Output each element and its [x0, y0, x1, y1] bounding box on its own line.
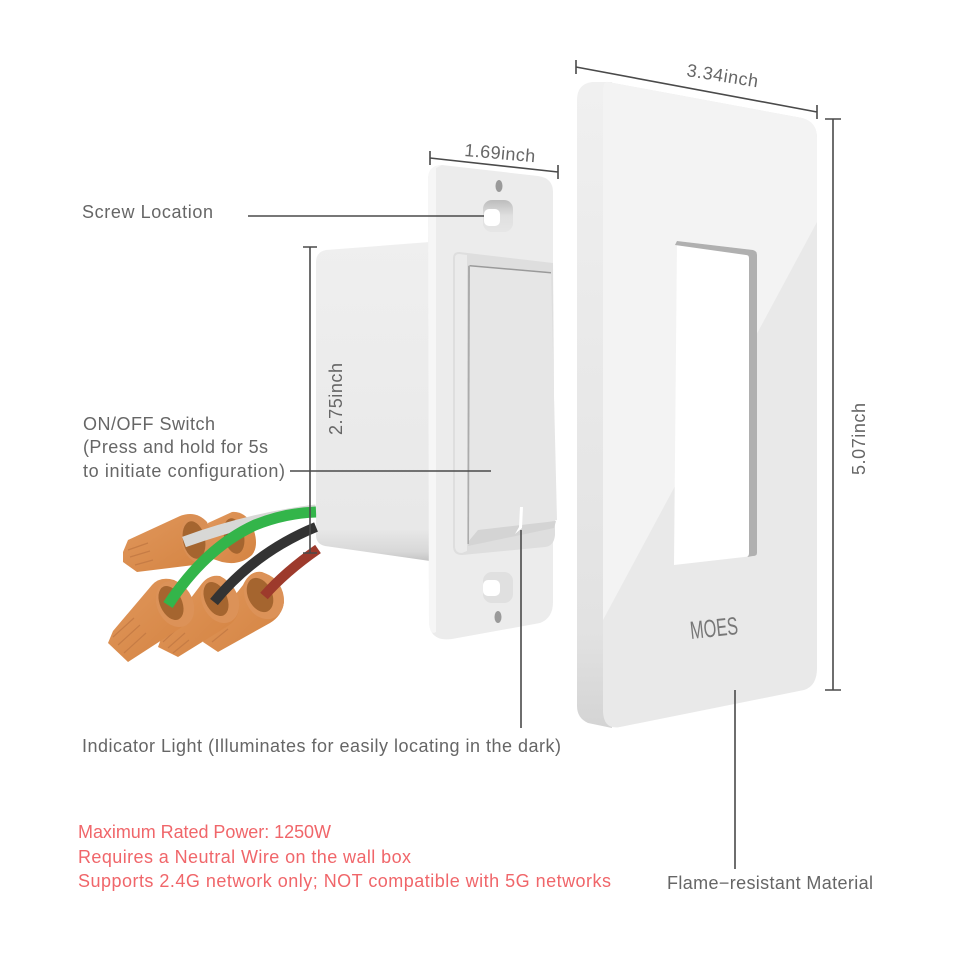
- dimension: 5.07 inch: 5.07inch: [849, 403, 869, 475]
- lower centre wire nut: [158, 571, 246, 657]
- front top wire nut: [123, 512, 218, 572]
- white wire: [184, 510, 316, 542]
- plate window: [674, 241, 757, 565]
- callout: indicator light: Indicator Light (Illuminates for easily locating in the dark): [82, 736, 561, 756]
- dimension: 3.34 inch: [576, 60, 817, 119]
- callout: on/off switch: ON/OFF Switch: [83, 414, 215, 434]
- dimension: 1.69 inch: [430, 140, 558, 179]
- lower right wire nut: [203, 566, 291, 652]
- plate gloss reflection: [603, 82, 817, 620]
- red specifications notes: Requires a Neutral Wire on the wall box: [78, 847, 411, 867]
- black wire: [214, 527, 316, 602]
- dimension: 5.07 inch: [825, 119, 869, 690]
- bottom mounting hole: [483, 572, 513, 623]
- green wire: [168, 512, 316, 605]
- callout: on/off switch: [83, 414, 491, 481]
- callout: screw location: Screw Location: [82, 202, 213, 222]
- dimension: 2.75 inch: [303, 247, 346, 553]
- top mounting hole: [483, 180, 513, 232]
- red specifications notes: [78, 822, 611, 891]
- back wire nut: [208, 512, 256, 563]
- dimension: 2.75 inch: 2.75inch: [326, 363, 346, 435]
- plate front face: [603, 82, 817, 727]
- rocker frame: [453, 252, 555, 555]
- callout: flame-resistant material: Flame−resistant Material: [667, 873, 873, 893]
- brand logo: MOES: [689, 612, 739, 645]
- red wire: [264, 549, 318, 596]
- mounting strap: [428, 165, 553, 639]
- callout: on/off switch: (Press and hold for 5s: [83, 437, 268, 457]
- red specifications notes: Supports 2.4G network only; NOT compatible with 5G networks: [78, 871, 611, 891]
- indicator light: [515, 507, 523, 534]
- dimension: 1.69 inch: 1.69inch: [464, 140, 536, 166]
- plate side edge: [577, 82, 612, 728]
- wires and wire nuts: [108, 510, 318, 662]
- rocker button: [468, 265, 557, 546]
- panel: cover plate: [577, 82, 817, 728]
- panel: switch body: [316, 165, 557, 639]
- rear box: [316, 242, 430, 561]
- lower left wire nut: [108, 575, 201, 662]
- callout: on/off switch: to initiate configuration): [83, 461, 285, 481]
- red specifications notes: Maximum Rated Power: 1250W: [78, 822, 331, 842]
- dimension: 3.34 inch: 3.34inch: [685, 60, 760, 91]
